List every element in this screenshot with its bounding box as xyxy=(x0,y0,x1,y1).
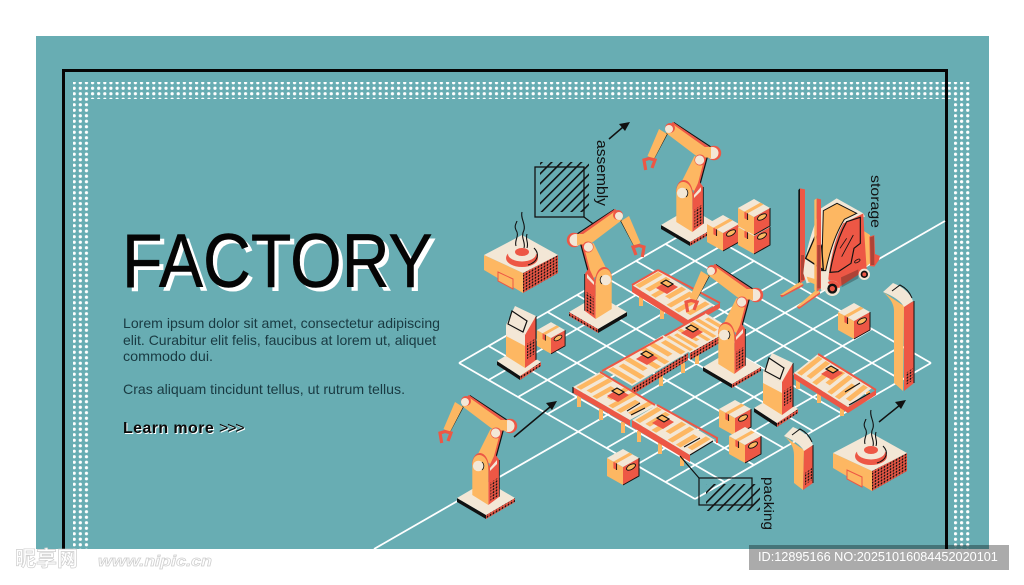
conveyor: lower right xyxy=(632,405,717,466)
cab back panel xyxy=(822,203,857,271)
heading: FACTORY: FACTORY xyxy=(122,219,433,304)
conveyor: right xyxy=(794,354,876,416)
terminal: left xyxy=(497,306,541,380)
watermark: image id bar xyxy=(749,545,1009,570)
pipe: long xyxy=(883,283,914,391)
boxes: lower right xyxy=(719,400,761,463)
body text: Lorem ipsum dolor sit amet, consectetur adipiscing xyxy=(123,315,440,331)
watermark: nipic logo xyxy=(15,548,212,571)
conveyor: lower left xyxy=(573,372,657,433)
label: assembly: assembly xyxy=(593,140,610,207)
body text: Cras aliquam tincidunt tellus, ut rutrum tellus. xyxy=(123,381,405,397)
cab window outline xyxy=(830,217,860,272)
conveyor: upper xyxy=(632,270,720,327)
fork: rear xyxy=(780,282,803,297)
pipe: short xyxy=(784,427,813,490)
robot arm: right xyxy=(686,264,763,388)
robot arm: middle xyxy=(567,209,644,333)
callout: packing hatched square xyxy=(680,456,760,511)
label: storage: storage xyxy=(868,175,884,228)
box: right xyxy=(838,303,870,339)
boxes: top stack xyxy=(707,199,770,254)
watermark: nipic logo: www.nipic.cn xyxy=(98,553,212,570)
box: by terminal xyxy=(537,322,565,354)
arrow: to assembly xyxy=(609,122,630,139)
conveyor: centre left segment xyxy=(602,335,690,395)
terminal: right xyxy=(754,353,798,427)
cab shell xyxy=(803,198,865,292)
side window xyxy=(806,235,823,270)
watermark: image id bar: ID:12895166 NO:20251016084452020101 xyxy=(758,550,998,564)
body text: elit. Curabitur elit felis, faucibus at lorem ut, aliquet xyxy=(123,332,436,348)
arrow: bottom left xyxy=(514,401,557,437)
cab red body xyxy=(828,213,867,287)
mast: front post xyxy=(814,198,821,292)
arrow: right xyxy=(879,400,906,422)
isometric floor grid xyxy=(374,221,945,549)
engine vents xyxy=(841,269,858,287)
robot arm: top xyxy=(644,122,721,246)
body rear block xyxy=(862,230,880,270)
body text xyxy=(123,315,440,397)
black frame lines xyxy=(64,70,946,549)
fork: front xyxy=(797,289,820,309)
robot arm: bottom left xyxy=(440,395,517,519)
conveyor: centre right segment xyxy=(659,313,732,386)
wheels xyxy=(825,269,870,296)
furnace right xyxy=(833,410,907,491)
callout: assembly hatched square xyxy=(535,162,600,229)
forklift xyxy=(780,188,880,309)
furnace left xyxy=(484,212,558,293)
box: front xyxy=(607,449,639,485)
watermark: nipic logo: 昵享网 xyxy=(15,548,78,571)
white dotted border xyxy=(73,82,970,549)
body text: commodo dui. xyxy=(123,348,213,364)
label: packing: packing xyxy=(761,477,777,530)
link: learn more: Learn more >>> xyxy=(123,420,243,437)
mast: rear post xyxy=(798,188,805,283)
